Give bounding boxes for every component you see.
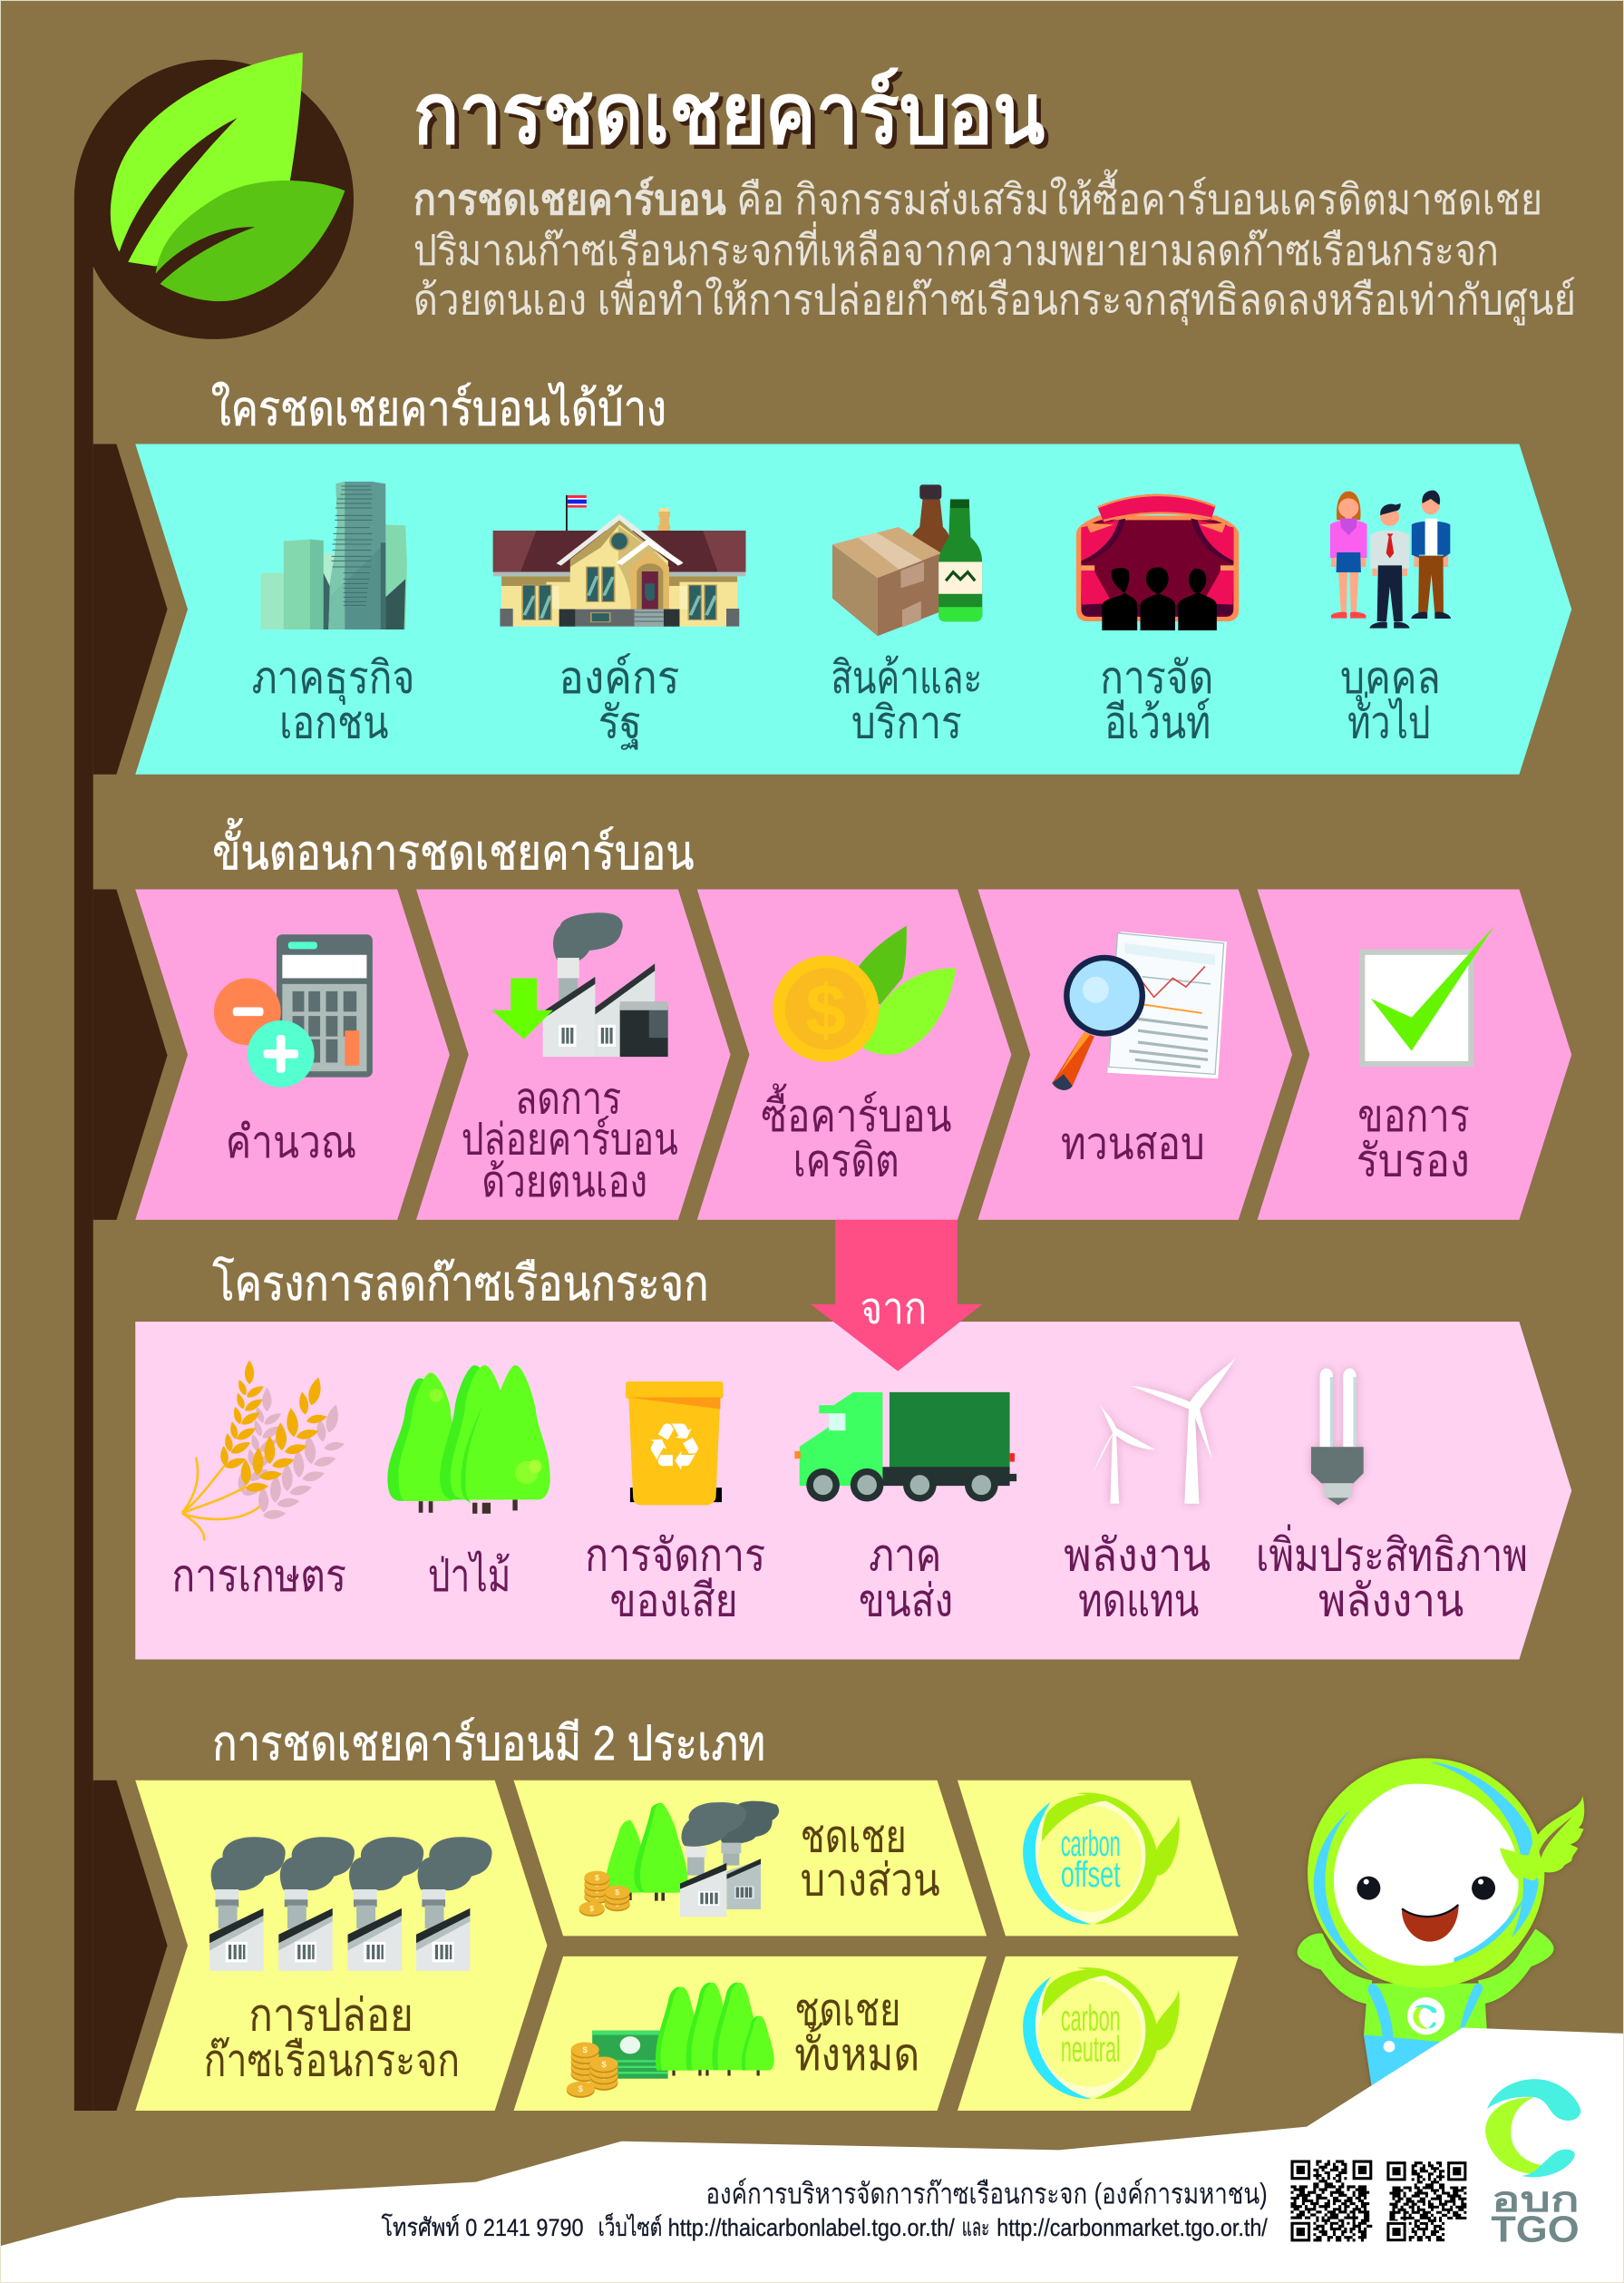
icon: money trees coins full [567,1983,774,2098]
label: buy carbon credits: ซื้อคาร์บอน [761,1083,952,1141]
small leaf [156,180,345,301]
mascot eyes [1357,1877,1380,1900]
label: events: อีเว้นท์ [1104,698,1211,748]
arrow: from [811,1220,982,1371]
badge: carbon neutral: carbon [1061,1998,1121,2039]
labels: who can offset [252,652,1441,750]
stem and leaf emblem [74,53,354,2111]
label: waste management: การจัดการ [585,1530,765,1581]
label: emissions: ก๊าซเรือนกระจก [204,2034,460,2085]
label: partial offset [801,1810,940,1905]
label: transport: ภาค [869,1530,941,1581]
badge: carbon offset: carbon [1061,1823,1121,1864]
labels: steps: คำนวณ [226,1117,356,1167]
section arrow: who [93,444,168,775]
man with blue jacket [1414,555,1448,567]
title: การชดเชยคาร์บอน [413,66,1045,161]
icon: coin and leaves [773,926,956,1062]
label: renewable energy: ทดแทน [1078,1575,1199,1625]
footer text: http://thaicarbonlabel.tgo.or.th/ [668,2213,955,2241]
panel: partial offset [514,1781,987,1936]
mascot mouth [1402,1905,1458,1942]
footer text [381,2178,1268,2241]
badge: carbon neutral: neutral [1061,2028,1121,2069]
mascot overalls [1364,1984,1483,2102]
label: reduce own emissions [462,1075,678,1206]
label: buy carbon credits [761,1083,952,1186]
panel: step 1 calculate [135,890,450,1220]
label: government organisation [559,652,679,750]
label: government organisation: องค์กร [559,652,679,703]
badge: carbon offset [1023,1793,1180,1925]
icon: four factories [209,1837,492,1971]
label: events: การจัด [1100,652,1213,703]
label: waste management [585,1530,765,1625]
label: partial offset: ชดเชย [801,1810,907,1861]
intro text [413,169,1576,327]
labels: steps [226,1075,1470,1206]
icon: wheat [182,1361,345,1540]
emblem circle and stem [74,60,354,2111]
label: renewable energy: พลังงาน [1064,1530,1211,1581]
panel: step 4 verify [977,890,1292,1220]
labels: steps: ทวนสอบ [1061,1117,1205,1168]
label: individuals: ทั่วไป [1347,692,1431,748]
arrow: from: จาก [860,1284,927,1333]
intro text: ปริมาณก๊าซเรือนกระจกที่เหลือจากความพยายามลดก๊าซเรือนกระจก [413,221,1499,274]
label: full offset [794,1984,919,2080]
panel: carbon offset badge [958,1781,1239,1936]
large leaf [111,53,303,267]
footer white corner [0,2028,1624,2283]
QR code 2 [1386,2161,1469,2244]
label: full offset: ชดเชย [794,1984,900,2034]
icon: recycling bin: ♻ [650,1420,699,1475]
mascot [1298,1758,1584,2102]
panel: full offset [514,1956,987,2111]
footer text: http://carbonmarket.tgo.or.th/ [997,2213,1268,2241]
badge: carbon neutral [1023,1967,1180,2099]
icon: theatre stage [1076,494,1239,630]
label: products and services: บริการ [851,698,962,748]
label: events [1100,652,1213,748]
footer text: และ [962,2213,989,2241]
label: request certification: ขอการ [1357,1090,1470,1141]
label: individuals [1340,652,1441,748]
logo Thai abbreviation: อบก [1492,2181,1580,2220]
icon: energy saving bulb [1311,1369,1364,1505]
mascot body [1364,1984,1488,2089]
mascot head [1308,1758,1544,1988]
label: energy efficiency: พลังงาน [1318,1575,1464,1625]
heading: who can offset: ใครชดเชยคาร์บอนได้บ้าง [211,382,666,436]
section arrow: steps [93,890,168,1220]
label: private business: เอกชน [279,698,388,748]
panel: step 3 buy credits [697,890,1011,1220]
panel: who can offset [135,444,1571,775]
icon: checkbox [1359,926,1494,1067]
label: products and services: สินค้าและ [831,652,982,703]
title: การชดเชยคาร์บอน [418,71,1049,165]
label: emissions: การปล่อย [248,1990,413,2041]
footer text: องค์การบริหารจัดการก๊าซเรือนกระจก (องค์การมหาชน) [705,2178,1268,2210]
man with tie [1373,569,1407,576]
label: energy efficiency [1256,1525,1528,1625]
section arrow: types [93,1781,168,2111]
icon: coin and leaves: $ [805,970,846,1051]
label: government organisation: รัฐ [598,698,642,750]
intro text: การชดเชยคาร์บอน คือ กิจกรรมส่งเสริมให้ซื้อคาร์บอนเครดิตมาชดเชย [413,169,1542,223]
panel: emissions [135,1781,547,2111]
woman [1337,492,1361,520]
audience silhouettes [1102,568,1137,630]
icon: trees factories coins partial [579,1801,779,1917]
label: renewable energy [1064,1530,1211,1625]
QR code 1 [1289,2159,1375,2244]
label: transport: ขนส่ง [859,1575,953,1625]
label: transport [859,1530,953,1625]
footer text: เว็บไซต์ [598,2211,662,2241]
label: waste management: ของเสีย [609,1575,738,1625]
icon: magnifier and report [1052,932,1227,1090]
mascot face [1334,1784,1519,1966]
heading: offset steps: ขั้นตอนการชดเชยคาร์บอน [212,818,695,880]
label: reduce own emissions: ปล่อยคาร์บอน [462,1116,678,1165]
label: individuals: บุคคล [1340,652,1441,705]
label: private business: ภาคธุรกิจ [252,652,414,705]
logo C mark [1487,2079,1580,2121]
label: partial offset: บางส่วน [801,1854,940,1905]
panel: reduction projects [135,1322,1571,1659]
icon: recycling bin [626,1381,724,1505]
panel: step 2 reduce [416,890,731,1220]
icon: government building [493,495,745,627]
label: buy carbon credits: เครดิต [793,1136,900,1186]
mascot arms [1298,1929,1554,2004]
icon: wind turbines [1093,1358,1236,1504]
label: private business [252,652,414,748]
labels: reduction projects: ป่าไม้ [428,1550,511,1601]
TGO logo [1485,2079,1580,2250]
icon: box and bottles [832,484,982,636]
icon: trees [387,1365,550,1514]
heading: two offset types: การชดเชยคาร์บอนมี 2 ประเภท [212,1717,765,1771]
panel: carbon neutral badge [958,1956,1239,2111]
footer text: โทรศัพท์ 0 2141 9790 [381,2213,584,2241]
label: reduce own emissions: ด้วยตนเอง [481,1157,647,1206]
label: reduce own emissions: ลดการ [515,1075,621,1124]
label: request certification: รับรอง [1357,1136,1470,1186]
panel: step 5 certify [1258,890,1571,1220]
label: request certification [1357,1090,1470,1186]
label: full offset: ทั้งหมด [794,2022,919,2080]
labels: reduction projects: การเกษตร [171,1550,346,1601]
label: products and services [831,652,982,748]
mascot leaf [1500,1796,1584,1880]
label: energy efficiency: เพิ่มประสิทธิภาพ [1256,1525,1528,1581]
heading: reduction projects: โครงการลดก๊าซเรือนกระจก [212,1256,709,1311]
logo TGO wordmark: TGO [1491,2209,1580,2250]
mascot chest badge [1407,1997,1444,2034]
icon: buildings [261,482,407,629]
icon: truck [794,1392,1016,1502]
icon: people [1330,491,1451,629]
label: emissions [204,1990,460,2085]
icon: factory and down arrow [491,912,668,1057]
icon: calculator [214,934,373,1088]
labels: reduction projects [171,1525,1528,1625]
badge: carbon offset: offset [1061,1854,1121,1895]
